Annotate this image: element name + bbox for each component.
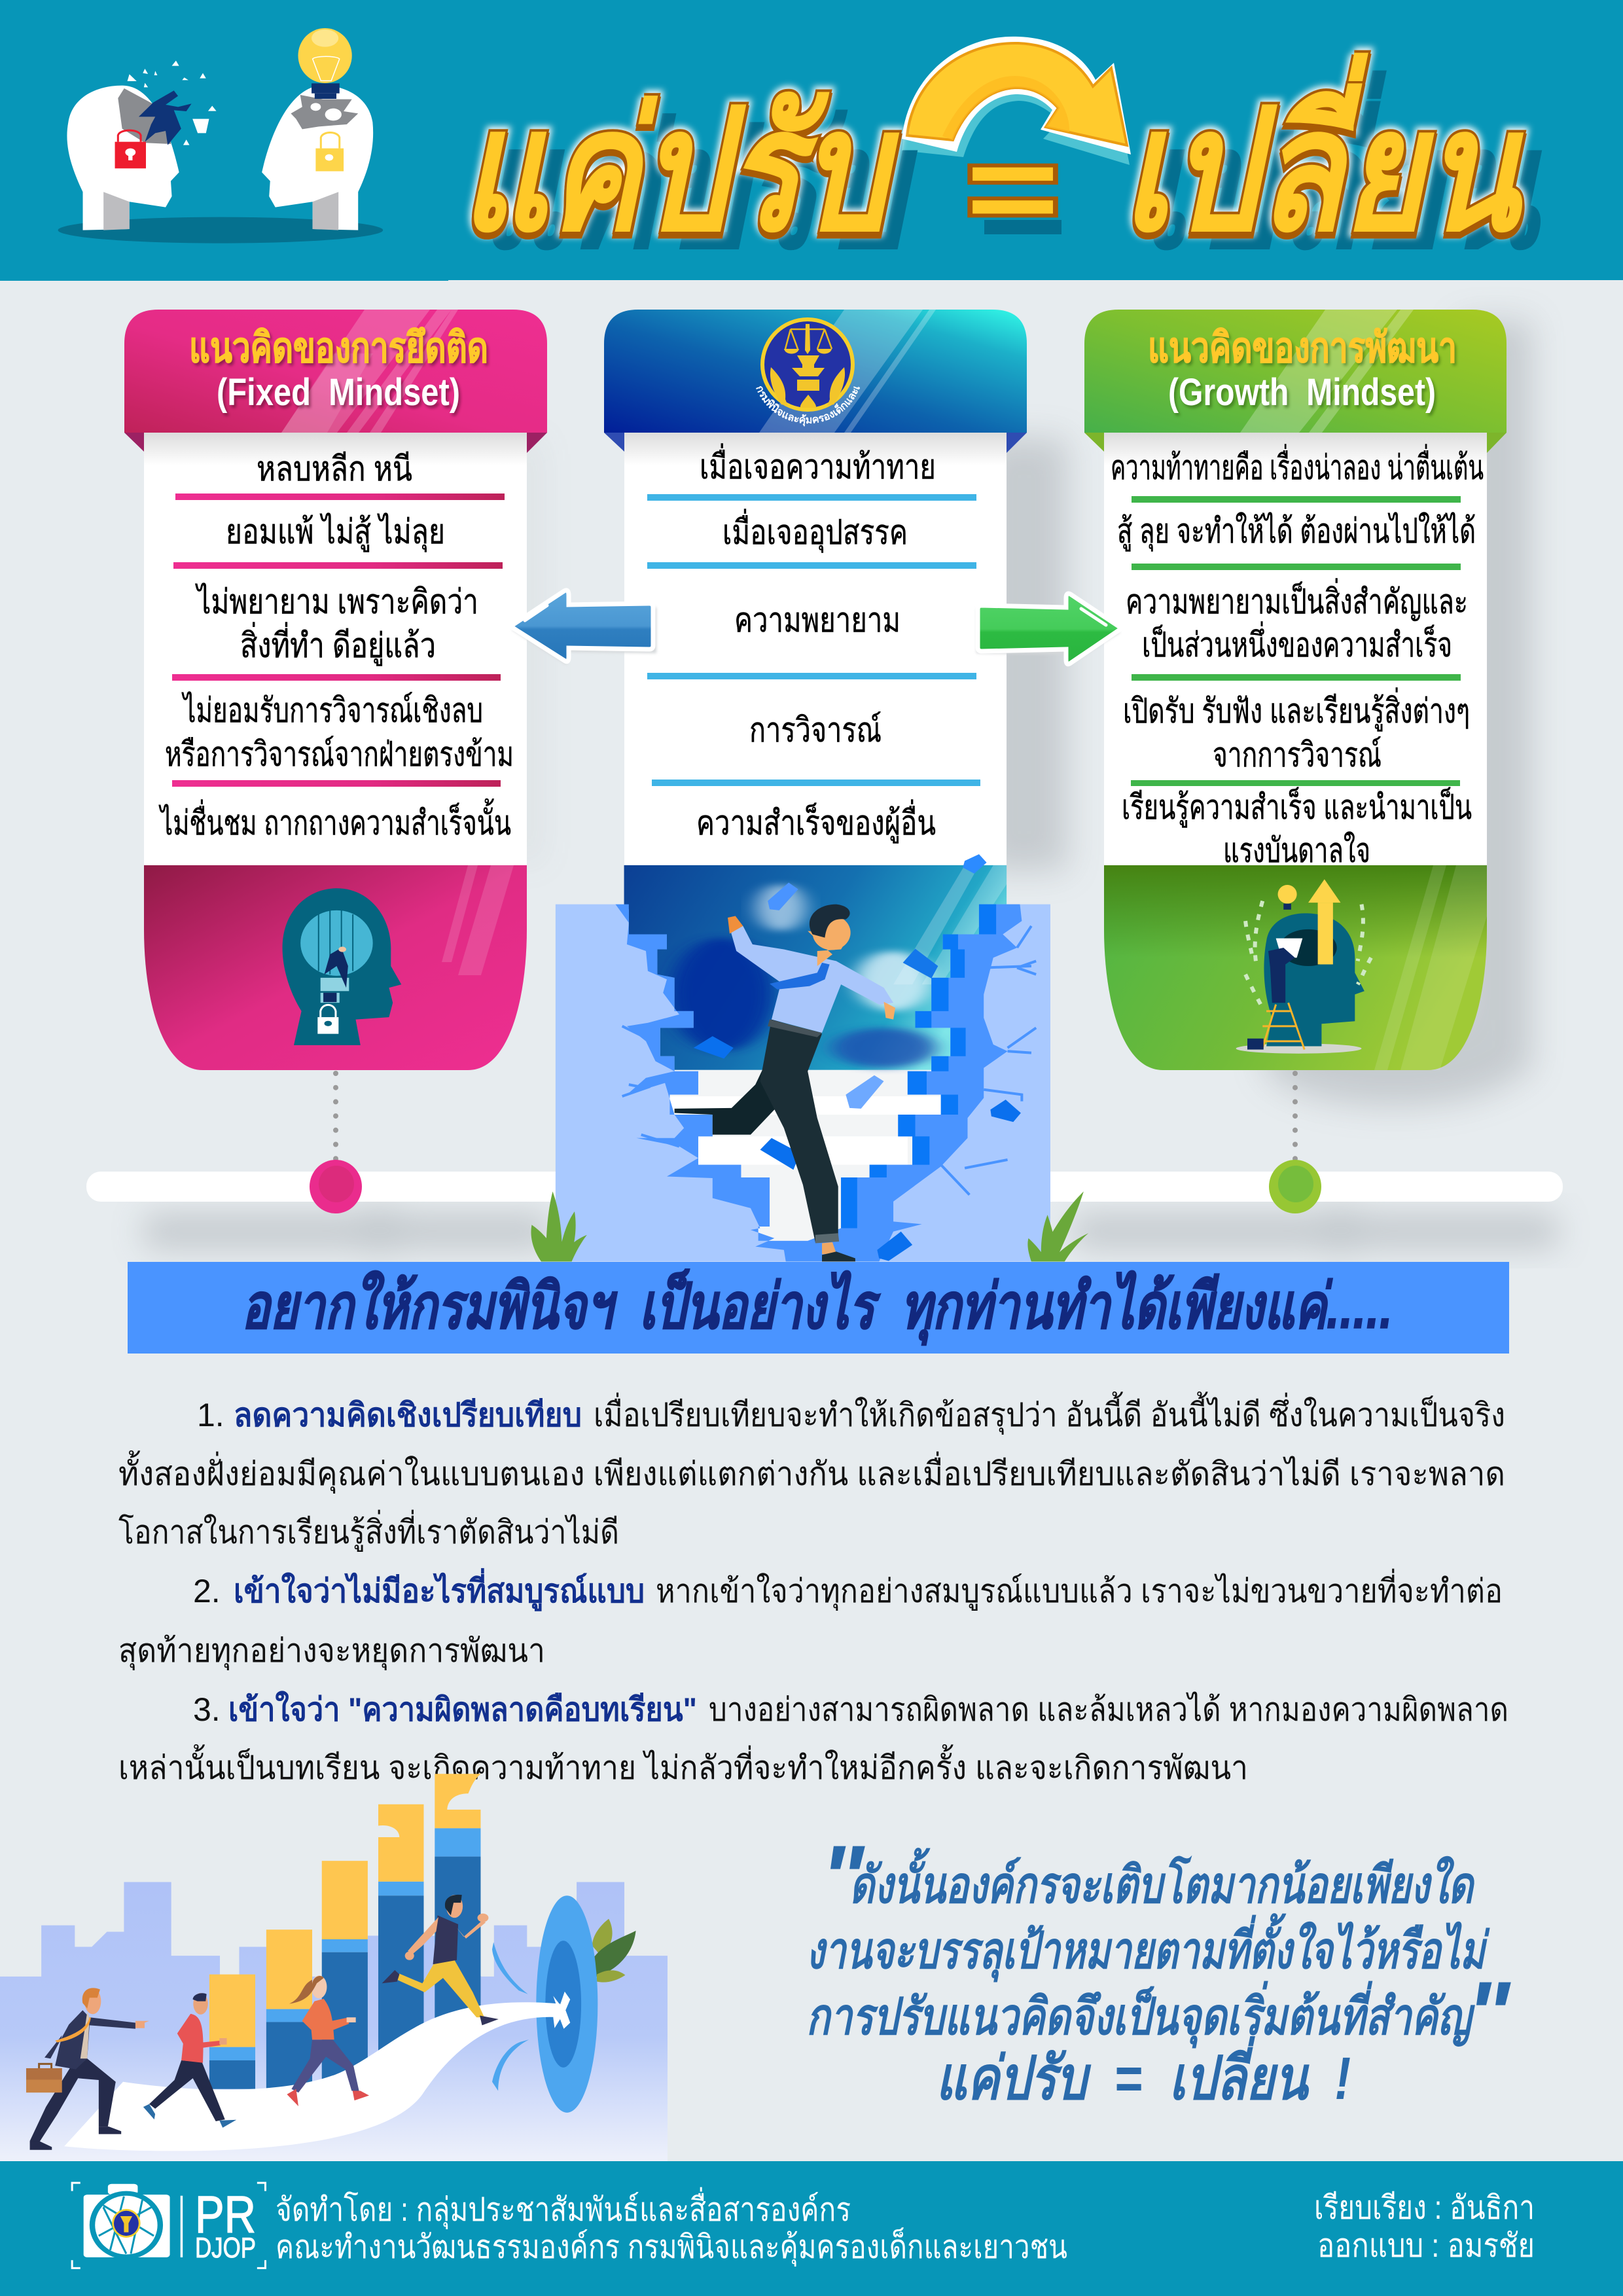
list: ยอมแพ้ ไม่สู้ ไม่ลุย <box>226 512 445 552</box>
arrow: curved yellow arrow <box>902 37 1131 165</box>
item 1: โอกาสในการเรียนรู้สิ่งที่เราตัดสินว่าไม่ดี <box>118 1510 619 1552</box>
closing quote mark: " <box>1467 1962 1511 2065</box>
body <box>624 433 1007 865</box>
title: แค่ปรับ = เปลี่ยน <box>460 37 1542 283</box>
item 2: เข้าใจว่าไม่มีอะไรที่สมบูรณ์แบบ <box>234 1568 645 1611</box>
body <box>144 433 527 865</box>
arrow: blue pointing left <box>510 590 656 665</box>
item 1 <box>118 1391 1505 1552</box>
list <box>647 443 980 844</box>
list: จากการวิจารณ์ <box>1213 736 1382 774</box>
title shadow: แค่ปรับ <box>478 94 919 283</box>
heading: (Fixed Mindset) <box>217 371 460 414</box>
item 1: ทั้งสองฝั่งย่อมมีคุณค่าในแบบตนเอง เพียงแต่แตกต่างกัน และเมื่อเปรียบเทียบและตัดสินว่าไม่ดี เราจะพลาด <box>118 1450 1505 1494</box>
item 2: สุดท้ายทุกอย่างจะหยุดการพัฒนา <box>118 1632 545 1670</box>
leaves <box>592 1919 636 1982</box>
road <box>64 2002 560 2151</box>
header band <box>0 0 1623 281</box>
credits left: คณะทำงานวัฒนธรรมองค์กร กรมพินิจและคุ้มครองเด็กและเยาวชน <box>276 2227 1067 2267</box>
list: ความสำเร็จของผู้อื่น <box>696 799 936 844</box>
ribbon folds <box>124 433 547 453</box>
title extrude: แค่ปรับ <box>460 80 901 269</box>
heading <box>1148 324 1459 416</box>
heading: แนวคิดของการพัฒนา <box>1148 324 1457 371</box>
list: เปิดรับ รับฟัง และเรียนรู้สิ่งต่างๆ <box>1123 687 1470 732</box>
item 2 <box>118 1568 1503 1670</box>
panel: centre situations <box>604 310 1027 865</box>
title sign: equals: = <box>966 120 1060 257</box>
footer logo text <box>195 2185 256 2264</box>
ribbon header <box>1084 310 1507 433</box>
target <box>492 1895 597 2113</box>
ribbon header <box>604 310 1027 433</box>
drop shadows of panels <box>510 321 1531 1106</box>
heading <box>189 324 490 416</box>
list: สิ่งที่ทำ ดีอยู่แล้ว <box>240 622 436 666</box>
icon: left head with lock <box>67 61 217 230</box>
ribbon folds <box>1084 433 1507 453</box>
item 2: หากเข้าใจว่าทุกอย่างสมบูรณ์แบบแล้ว เราจะไม่ขวนขวายที่จะทำต่อ <box>656 1569 1503 1611</box>
list: หรือการวิจารณ์จากฝ่ายตรงข้าม <box>165 736 514 774</box>
panel: growth mindset <box>1084 310 1507 1070</box>
item 3: เข้าใจว่า "ความผิดพลาดคือบทเรียน" <box>228 1691 697 1728</box>
callout: quote <box>806 1826 1511 2112</box>
list: สู้ ลุย จะทำให้ได้ ต้องผ่านไปให้ได้ <box>1117 512 1476 552</box>
bottom cap <box>144 865 527 1070</box>
list: ความพยายามเป็นสิ่งสำคัญและ <box>1126 578 1468 621</box>
list <box>1111 444 1484 870</box>
title shadow <box>478 70 1542 283</box>
illustration: team running to target <box>0 1774 668 2161</box>
icon: department seal: กรมพินิจและคุ้มครองเด็กและเยาวชน <box>756 386 860 427</box>
footer band <box>0 2161 1623 2296</box>
credits right: ออกแบบ : อมรชัย <box>1317 2227 1535 2264</box>
heading: (Growth Mindset) <box>1170 374 1438 416</box>
item 3 <box>118 1691 1508 1786</box>
heading: (Fixed Mindset) <box>219 374 462 416</box>
title glow: แค่ปรับ <box>460 76 901 265</box>
opening quote mark: " <box>821 1826 865 1929</box>
timeline dot pink <box>310 1160 362 1213</box>
body text <box>118 1391 1508 1786</box>
icon: two heads, fixed and growth <box>58 28 383 243</box>
item 2: 2. <box>193 1573 221 1609</box>
icon: right head with bulb <box>262 28 373 230</box>
icon: department seal <box>124 310 860 427</box>
list: เป็นส่วนหนึ่งของความสำเร็จ <box>1142 621 1452 664</box>
item 3: เหล่านั้นเป็นบทเรียน จะเกิดความท้าทาย ไม่กลัวที่จะทำใหม่อีกครั้ง และจะเกิดการพัฒนา <box>118 1744 1248 1786</box>
list: เรียนรู้ความสำเร็จ และนำมาเป็น <box>1122 787 1472 828</box>
heading: แนวคิดของการยึดติด <box>189 324 488 371</box>
list: เมื่อเจอความท้าทาย <box>700 443 936 486</box>
bright lower hole <box>656 1065 960 1262</box>
title word: แค่ปรับ: แค่ปรับ <box>460 76 901 265</box>
list: แรงบันดาลใจ <box>1223 831 1370 870</box>
darker brick edges <box>841 905 996 1229</box>
list: ความพยายาม <box>734 601 901 639</box>
plants <box>531 1191 1088 1262</box>
brick ring around hole <box>615 905 1022 1262</box>
item 3: บางอย่างสามารถผิดพลาด และล้มเหลวได้ หากมองความผิดพลาด <box>709 1691 1508 1728</box>
heading: (Growth Mindset) <box>1168 371 1436 414</box>
list: หลบหลีก หนี <box>257 450 412 488</box>
item 1: 1. <box>197 1397 224 1433</box>
title glow: เปลี่ยน <box>1122 52 1524 265</box>
bottom cap <box>1104 865 1487 1070</box>
man <box>675 905 895 1262</box>
gradient behind hole <box>624 865 1007 1070</box>
footer logo <box>72 2183 265 2268</box>
credits left <box>276 2187 1067 2267</box>
title glow <box>460 52 1524 265</box>
wall with hole <box>556 905 1050 1262</box>
list: ไม่พยายาม เพราะคิดว่า <box>195 583 478 621</box>
cracks <box>622 926 1036 1195</box>
timeline shadows <box>144 1207 1558 1254</box>
dotted connector right <box>1293 1073 1298 1162</box>
title extrude <box>460 56 1524 269</box>
credits right <box>1314 2189 1535 2264</box>
title extrude: เปลี่ยน <box>1122 56 1524 269</box>
footer logo text: PR <box>195 2185 256 2244</box>
falling bricks <box>694 854 1021 1261</box>
timeline dot green <box>1269 1160 1321 1213</box>
dotted connector left <box>333 1073 338 1162</box>
list: เมื่อเจออุปสรรค <box>722 509 908 553</box>
arrow: green pointing right <box>976 594 1122 666</box>
icon: locked head <box>283 888 401 1045</box>
runner 3 <box>287 1975 369 2106</box>
item 3: 3. <box>193 1691 221 1728</box>
list: ไม่ยอมรับการวิจารณ์เชิงลบ <box>181 691 483 730</box>
list: การวิจารณ์ <box>749 711 882 749</box>
title shadow: เปลี่ยน <box>1141 70 1542 283</box>
ribbon folds <box>604 433 1027 453</box>
skyline <box>0 1882 668 2161</box>
credits left: จัดทำโดย : กลุ่มประชาสัมพันธ์และสื่อสารองค์กร <box>276 2187 851 2229</box>
runner 1: businessman <box>26 1988 149 2150</box>
list: ไม่ชื่นชม ถากถางความสำเร็จนั้น <box>158 798 511 842</box>
footer logo text: DJOP <box>195 2232 256 2264</box>
runner 4 <box>382 1895 499 2025</box>
body <box>1104 433 1487 865</box>
banner <box>128 1262 1509 1354</box>
timeline bar <box>86 1172 1563 1202</box>
list <box>158 450 514 842</box>
title word: เปลี่ยน: เปลี่ยน <box>1122 52 1524 265</box>
credits right: เรียบเรียง : อันธิกา <box>1314 2189 1535 2226</box>
bar chart <box>209 1774 480 2089</box>
heading: แนวคิดของการยึดติด <box>191 327 490 374</box>
panel: fixed mindset <box>124 310 547 1070</box>
heading: แนวคิดของการพัฒนา <box>1150 327 1459 374</box>
runner 2 <box>143 1993 236 2128</box>
item 1: ลดความคิดเชิงเปรียบเทียบ <box>234 1397 582 1433</box>
illustration: man breaking through wall <box>531 854 1088 1262</box>
item 1: เมื่อเปรียบเทียบจะทำให้เกิดข้อสรุปว่า อันนี้ดี อันนี้ไม่ดี ซึ่งในความเป็นจริง <box>594 1391 1505 1435</box>
callout: quote: แค่ปรับ = เปลี่ยน ! <box>936 2036 1351 2112</box>
icon: growth head <box>1236 879 1371 1054</box>
timeline <box>86 1073 1563 1254</box>
ribbon header <box>124 310 547 433</box>
